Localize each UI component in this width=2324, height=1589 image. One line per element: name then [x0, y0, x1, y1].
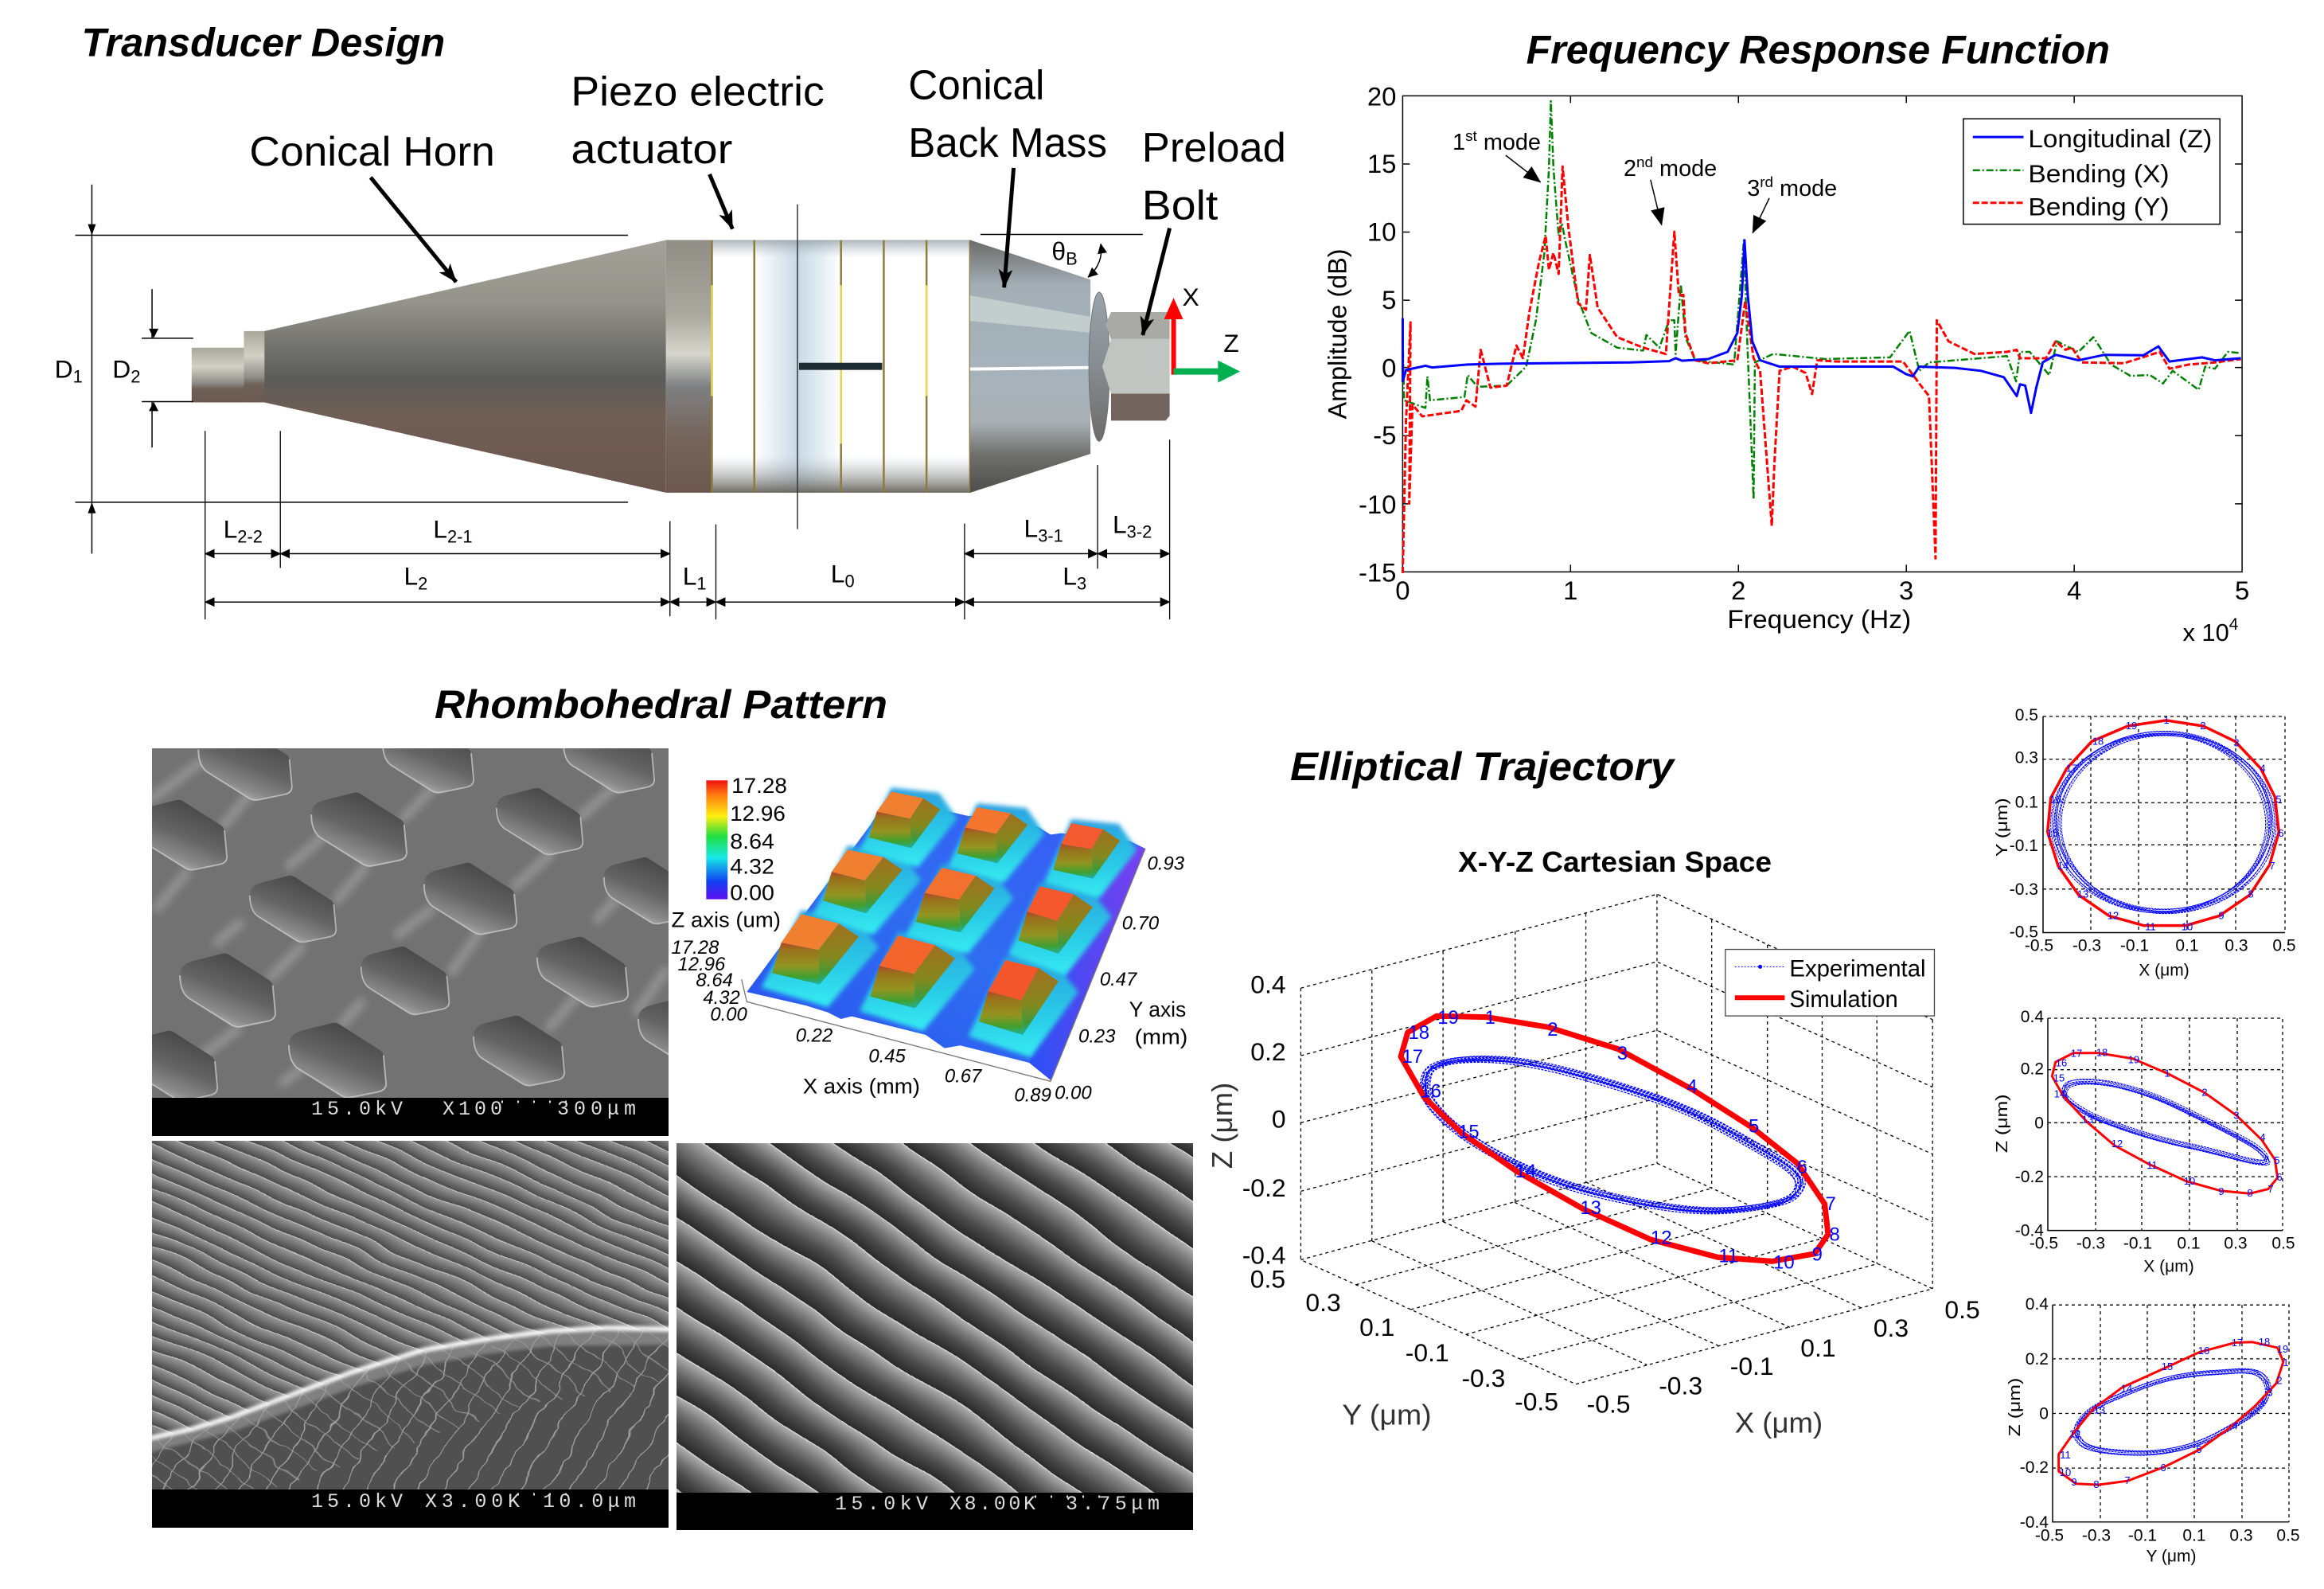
arrow: preload bolt: [1143, 228, 1170, 335]
chart: Y-Z projection: Y (μm): [2146, 1548, 2197, 1566]
y axis ticks: [1250, 1264, 1558, 1416]
point numbers: 3: [1617, 1043, 1628, 1064]
chart: Y-Z projection: 0.5: [2276, 1527, 2300, 1545]
x axis ticks: -0.1: [1730, 1352, 1774, 1380]
legend: [1963, 119, 2220, 224]
chart: X-Y projection: 1: [2163, 714, 2170, 726]
trajectory: experimental: [1420, 1056, 1805, 1214]
chart: X-Z projection: 7: [2267, 1183, 2274, 1195]
point numbers: 17: [1402, 1046, 1423, 1068]
chart: X-Z projection: 17: [2071, 1048, 2082, 1060]
coordinate axes X and Z: [1164, 283, 1240, 383]
chart: X-Z projection: 0.4: [2021, 1008, 2044, 1026]
label: preload bolt: Bolt: [1142, 182, 1218, 228]
chart: X-Y projection: 9: [2218, 910, 2225, 922]
chart: X-Y projection: 16: [2050, 793, 2061, 805]
curve: longitudinal Z: [1402, 240, 2241, 413]
panel: frequency response function: [1323, 28, 2249, 646]
chart: X-Z projection: X (μm): [2143, 1257, 2194, 1275]
chart: X-Z projection: 12: [2111, 1138, 2123, 1150]
point numbers: 6: [1797, 1157, 1807, 1178]
dimensions: lengths L0 to L3: 3-1: [1038, 526, 1063, 546]
SEM caption X100: [311, 1098, 636, 1121]
3D surface map: [742, 787, 1145, 1081]
chart: X-Y projection: 19: [2126, 720, 2137, 732]
chart title: X-Y-Z Cartesian Space: [1458, 845, 1772, 878]
y axis ticks: 0.3: [1305, 1288, 1341, 1317]
axis labels: 3D surface: Z axis (um): [672, 908, 781, 931]
y axis ticks: -0.3: [1461, 1364, 1505, 1392]
y axis tick labels: 20: [1367, 81, 1396, 111]
legend: Bending (Y): [2028, 193, 2170, 221]
chart: X-Y projection: 12: [2108, 910, 2119, 922]
chart: Y-Z projection: 19: [2277, 1343, 2288, 1355]
chart: X-Z projection: 0.2: [2021, 1060, 2044, 1079]
SEM caption X100: X100: [443, 1098, 502, 1121]
z axis ticks: 0.2: [1250, 1037, 1286, 1066]
chart: X-Y projection: -0.3: [2010, 880, 2038, 899]
x axis ticks: [1587, 1295, 1980, 1419]
label: conical back mass: [908, 61, 1107, 166]
chart: X-Y projection: -0.5: [2025, 936, 2053, 955]
axis labels: 3D surface: 0.23: [1078, 1026, 1116, 1048]
axis labels: 3D surface: 12.96: [678, 954, 726, 975]
z axis ticks: -0.4: [1242, 1241, 1286, 1270]
axis labels: 3D surface: 0.93: [1148, 853, 1185, 875]
y axis tick labels: 15: [1367, 149, 1396, 178]
x axis tick labels: 0: [1395, 576, 1410, 605]
y axis ticks: -0.5: [1515, 1388, 1558, 1416]
colour scale: [706, 774, 787, 905]
chart: X-Y projection: 15: [2047, 827, 2058, 839]
chart: X-Y projection: 3: [2233, 737, 2240, 749]
callout: 1st mode: [1452, 128, 1541, 182]
chart: X-Z projection: 6: [2276, 1171, 2283, 1183]
SEM caption X8.00K: [835, 1493, 1160, 1516]
chart: X-Y projection: 18: [2092, 736, 2104, 748]
axis titles: X (μm): [1735, 1407, 1823, 1439]
panel: elliptical trajectory: [1207, 706, 2300, 1566]
chart: X-Z projection: -0.1: [2123, 1235, 2152, 1253]
dimensions: diameters D1 and D2: 2: [131, 367, 140, 387]
legend: Longitudinal (Z): [2028, 124, 2212, 153]
dimensions: lengths L0 to L3: L: [831, 559, 844, 588]
angle theta B: θ: [1051, 236, 1066, 265]
y axis ticks: 0.5: [1250, 1264, 1285, 1293]
SEM caption X8.00K: 3.75μm: [1066, 1493, 1160, 1516]
x axis tick labels: 4: [2067, 576, 2081, 605]
coordinate axes X and Z: X: [1183, 283, 1199, 311]
dimensions: diameters D1 and D2: [55, 185, 1143, 554]
chart: X-Z projection: 16: [2056, 1057, 2067, 1069]
SEM caption X100: 15.0kV: [311, 1098, 403, 1121]
chart: X-Z projection: [1994, 1008, 2295, 1275]
x axis ticks: 0.3: [1874, 1314, 1909, 1342]
chart: Y-Z projection: 0: [2039, 1405, 2049, 1423]
axis labels: 3D surface: (mm): [1135, 1025, 1187, 1049]
chart: Y-Z projection: 18: [2259, 1336, 2270, 1348]
point numbers: 5: [1749, 1115, 1759, 1137]
3D grid box: [1300, 894, 1932, 1384]
chart: Y-Z projection: 0.1: [2182, 1527, 2206, 1545]
chart: Y-Z projection: 13: [2094, 1404, 2105, 1415]
chart: X-Z projection: 15: [2053, 1072, 2065, 1084]
point numbers: 15: [1458, 1121, 1480, 1142]
panel: rhombohedral pattern: [120, 682, 1230, 1530]
dimensions: lengths L0 to L3: 3-2: [1127, 522, 1152, 542]
chart: X-Z projection: 8: [2247, 1187, 2253, 1199]
chart: Y-Z projection: 9: [2071, 1476, 2077, 1488]
chart: X-Y projection: 11: [2145, 921, 2156, 933]
dimensions: lengths L0 to L3: 1: [696, 573, 707, 593]
chart: Y-Z projection: 10: [2060, 1466, 2071, 1478]
SEM caption X8.00K: X8.00K: [949, 1493, 1035, 1516]
piezo electric actuator rings: [712, 240, 970, 493]
x axis tick labels: 1: [1563, 576, 1577, 605]
label: preload bolt: [1142, 124, 1286, 228]
legend: Bending (X): [2028, 159, 2170, 188]
axis labels: 3D surface: 0.00: [710, 1004, 748, 1025]
chart: Y-Z projection: 14: [2121, 1383, 2132, 1395]
SEM image X100: [152, 748, 669, 1136]
y axis tick labels: 5: [1382, 285, 1396, 314]
back row blocks: [869, 791, 1120, 879]
axis labels: 3D surface: 17.28: [672, 937, 719, 958]
middle row blocks: [823, 849, 1093, 954]
chart: X-Z projection: 4: [2260, 1131, 2266, 1143]
callout: 2nd mode: nd: [1636, 154, 1653, 171]
axis titles: Z (μm): [1207, 1083, 1238, 1169]
centre line: [797, 205, 798, 529]
axis labels: 3D surface: 4.32: [703, 987, 740, 1009]
chart: X-Y projection: 0.3: [2225, 936, 2248, 955]
chart: X-Z projection: 10: [2184, 1175, 2195, 1187]
chart: X-Y projection: 0.5: [2015, 706, 2038, 724]
callout: 3rd mode: [1747, 174, 1837, 233]
y axis tick labels: -15: [1359, 557, 1396, 587]
heading: elliptical trajectory: Elliptical Trajectory: [1290, 744, 1675, 789]
chart: X-Y projection: 4: [2260, 763, 2266, 775]
legend: Simulation: [1789, 986, 1898, 1013]
chart: Y-Z projection: 17: [2232, 1337, 2243, 1349]
axis labels: 3D surface: 0.00: [1055, 1082, 1092, 1103]
legend: Experimental: [1789, 955, 1926, 982]
front row blocks: [772, 914, 1059, 1035]
preload bolt: [1102, 312, 1170, 420]
chart: X-Y projection: X (μm): [2139, 961, 2189, 979]
transducer body: [192, 240, 1170, 493]
axis labels: 3D surface: 0.22: [796, 1025, 833, 1047]
dimensions: lengths L0 to L3: L: [224, 515, 237, 544]
z axis ticks: 0.4: [1250, 970, 1286, 998]
axis labels: 3D surface: 0.47: [1100, 969, 1138, 990]
dimensions: lengths L0 to L3: L: [683, 561, 696, 590]
chart: X-Y projection: 0.5: [2272, 936, 2296, 955]
chart: Y-Z projection: 7: [2124, 1474, 2131, 1486]
chart: X-Z projection: 0: [2034, 1114, 2044, 1132]
exponent: 4: [2229, 615, 2238, 634]
chart: Y-Z projection: 16: [2198, 1345, 2209, 1357]
chart: Y-Z projection: 4: [2232, 1419, 2238, 1431]
heading: frequency response function: Frequency Response Function: [1527, 28, 2110, 72]
coordinate axes X and Z: Z: [1223, 329, 1239, 357]
point numbers: 19: [1437, 1007, 1459, 1029]
dimensions: lengths L0 to L3: L: [433, 515, 447, 544]
chart: X-Z projection: 3: [2233, 1109, 2240, 1121]
callout: 3rd mode: rd: [1760, 174, 1773, 191]
chart: Y-Z projection: 1: [2283, 1357, 2289, 1368]
callout: 1st mode: 1: [1452, 130, 1465, 155]
SEM caption X3.00K: X3.00K: [425, 1490, 520, 1513]
SEM image X3.00K: [152, 1141, 669, 1528]
chart: X-Y projection: -0.1: [2010, 837, 2038, 855]
y axis ticks: -0.1: [1406, 1338, 1449, 1367]
arrow: conical horn: [371, 178, 456, 282]
dimensions: lengths L0 to L3: L: [1063, 561, 1077, 590]
dimensions: lengths L0 to L3: [205, 431, 1170, 619]
callout: 3rd mode: 3: [1747, 176, 1760, 201]
point numbers: 4: [1686, 1076, 1698, 1098]
axis labels: 3D surface: X axis (mm): [803, 1074, 920, 1098]
chart: X-Z projection: -0.3: [2076, 1235, 2105, 1253]
point numbers: 10: [1773, 1252, 1795, 1274]
angle theta B: [1051, 236, 1102, 277]
chart: Y-Z projection: 0.3: [2229, 1527, 2253, 1545]
x axis ticks: -0.5: [1587, 1390, 1631, 1419]
chart: amplitude versus frequency: [1323, 81, 2249, 646]
dimensions: diameters D1 and D2: 1: [73, 367, 83, 387]
y axis tick labels: 10: [1367, 217, 1396, 246]
point numbers: 18: [1408, 1022, 1429, 1044]
dimensions: lengths L0 to L3: L: [404, 561, 418, 590]
chart: X-Y projection: [1994, 706, 2296, 979]
plot frame and ticks: [1402, 96, 2242, 572]
dimensions: lengths L0 to L3: 2-2: [237, 527, 263, 547]
x axis tick labels: 2: [1731, 576, 1745, 605]
chart: Y-Z projection: 2: [2276, 1375, 2283, 1387]
x axis ticks: -0.3: [1659, 1372, 1702, 1400]
axis labels: 3D surface: [672, 853, 1187, 1106]
chart: Y-Z projection: [2006, 1295, 2300, 1566]
axis titles: Y (μm): [1342, 1400, 1432, 1431]
chart: X-Z projection: 11: [2147, 1159, 2158, 1171]
point numbers: 12: [1651, 1228, 1671, 1249]
point numbers: 1: [1485, 1007, 1495, 1029]
arrow: back mass: [1004, 168, 1014, 287]
callout: 1st mode: mode: [1477, 130, 1541, 155]
plateaus: [762, 787, 1137, 1057]
arrow: piezo actuator: [710, 174, 732, 229]
SEM caption X3.00K: [311, 1490, 636, 1513]
chart: Y-Z projection: 11: [2060, 1449, 2071, 1461]
chart: Y-Z projection: Z (μm): [2006, 1378, 2024, 1436]
x axis ticks: 0.1: [1800, 1333, 1836, 1362]
chart: Y-Z projection: -0.4: [2020, 1513, 2049, 1532]
chart: X-Z projection: 19: [2128, 1054, 2139, 1066]
curve: bending Y: [1402, 166, 2241, 573]
point numbers: 16: [1420, 1081, 1441, 1103]
chart: X-Z projection: 5: [2274, 1154, 2280, 1166]
y axis tick labels: 0: [1382, 353, 1396, 383]
chart: X-Z projection: Z (μm): [1994, 1095, 2011, 1153]
surface base: [747, 791, 1145, 1080]
point numbers: 11: [1718, 1246, 1738, 1267]
chart: X-Y projection: 2: [2200, 720, 2206, 732]
dimensions: lengths L0 to L3: 0: [844, 571, 855, 591]
chart: X-Z projection: -0.5: [2030, 1235, 2058, 1253]
point numbers: 8: [1829, 1224, 1840, 1246]
label: conical horn: Conical Horn: [249, 128, 495, 174]
chart: X-Y projection: 8: [2248, 888, 2254, 900]
chart: X-Y projection: -0.5: [2010, 923, 2038, 941]
angle theta B: B: [1066, 248, 1078, 268]
chart: Y-Z projection: -0.1: [2128, 1527, 2157, 1545]
y axis ticks: 0.1: [1359, 1313, 1394, 1341]
exponent: x 10: [2182, 619, 2229, 646]
chart: X-Y projection: Y (μm): [1994, 798, 2011, 857]
x axis tick labels: [1395, 576, 2249, 605]
chart: X-Y projection: 14: [2057, 860, 2069, 872]
trajectory: simulation: [1401, 1016, 1828, 1261]
chart: X-Y projection: 0.1: [2015, 793, 2038, 811]
label: piezo electric actuator: actuator: [571, 126, 732, 172]
z axis ticks: 0: [1272, 1104, 1286, 1133]
point numbers: 2: [1547, 1019, 1558, 1040]
z axis ticks: [1242, 970, 1286, 1270]
chart: X-Y projection: 0.3: [2015, 749, 2038, 767]
chart: X-Y projection: 5: [2275, 793, 2282, 805]
SEM image X8.00K: [677, 1143, 1193, 1530]
conical back mass: [970, 240, 1090, 493]
chart: Y-Z projection: 3: [2267, 1387, 2273, 1399]
conical horn: [192, 240, 712, 493]
chart: Y-Z projection: -0.2: [2020, 1458, 2049, 1477]
colour scale: 12.96: [730, 802, 786, 826]
chart: X-Y projection: 6: [2278, 827, 2284, 839]
point numbers: 9: [1812, 1244, 1823, 1266]
chart: X-Z projection: -0.2: [2015, 1168, 2044, 1186]
SEM caption X8.00K: 15.0kV: [835, 1493, 928, 1516]
dimensions: lengths L0 to L3: 2-1: [447, 527, 473, 547]
chart: X-Y projection: -0.1: [2120, 936, 2149, 955]
label: preload bolt: Preload: [1142, 124, 1286, 170]
y axis title: Amplitude (dB): [1323, 248, 1352, 419]
z axis ticks: -0.2: [1242, 1173, 1286, 1202]
SEM caption X3.00K: 15.0kV: [311, 1490, 403, 1513]
axis labels: 3D surface: 0.89: [1014, 1084, 1051, 1106]
label: conical back mass: Back Mass: [908, 119, 1107, 166]
label: piezo electric actuator: Piezo electric: [571, 68, 825, 114]
chart: X-Y projection: 17: [2066, 763, 2077, 775]
chart: Y-Z projection: 12: [2069, 1427, 2080, 1439]
panel: transducer design: [55, 21, 1286, 619]
callout: 2nd mode: 2: [1624, 156, 1636, 182]
axis titles: [1207, 1083, 1823, 1439]
legend: [1725, 950, 1934, 1016]
callout: 3rd mode: mode: [1773, 176, 1837, 201]
chart: X-Y projection: 0.1: [2175, 936, 2199, 955]
x axis tick labels: 5: [2235, 576, 2249, 605]
x axis ticks: 0.5: [1944, 1295, 1980, 1324]
colour scale: 17.28: [731, 774, 787, 798]
chart: X-Z projection: 0.5: [2271, 1235, 2295, 1253]
y axis tick labels: -10: [1359, 490, 1396, 519]
chart: X-Z projection: 0.1: [2177, 1235, 2201, 1253]
chart: Y-Z projection: 6: [2160, 1462, 2166, 1474]
dimensions: diameters D1 and D2: D: [112, 355, 131, 384]
curve: bending X: [1402, 101, 2241, 499]
point numbers: 7: [1825, 1193, 1836, 1215]
chart: X-Y projection: 13: [2077, 888, 2088, 900]
chart: X-Z projection: 1: [2164, 1068, 2170, 1080]
chart: X-Z projection: 14: [2054, 1088, 2065, 1099]
axis labels: 3D surface: Y axis: [1129, 998, 1186, 1021]
chart: Y-Z projection: 0.2: [2026, 1350, 2049, 1368]
axis labels: 3D surface: 8.64: [696, 970, 733, 991]
dimensions: lengths L0 to L3: L: [1024, 514, 1038, 543]
heading: transducer design: Transducer Design: [81, 21, 445, 65]
chart: Y-Z projection: 8: [2093, 1478, 2100, 1490]
x axis tick labels: 3: [1899, 576, 1913, 605]
callout: 2nd mode: [1624, 154, 1717, 225]
colour scale: 8.64: [730, 830, 774, 853]
axis labels: 3D surface: 0.45: [868, 1046, 907, 1068]
chart: X-Z projection: 9: [2218, 1185, 2225, 1197]
axis labels: 3D surface: 0.70: [1122, 912, 1160, 934]
dimensions: lengths L0 to L3: 2: [418, 573, 427, 593]
colour scale: 4.32: [730, 855, 774, 879]
chart: X-Z projection: 2: [2201, 1087, 2208, 1098]
chart: Y-Z projection: 15: [2162, 1361, 2173, 1372]
x axis title: Frequency (Hz): [1727, 604, 1911, 634]
colour scale: 0.00: [730, 881, 774, 905]
callout: 1st mode: st: [1465, 128, 1478, 145]
y axis tick labels: [1359, 81, 1396, 587]
chart: Y-Z projection: 5: [2196, 1443, 2202, 1455]
label: piezo electric actuator: [571, 68, 825, 172]
axis labels: 3D surface: 0.67: [945, 1065, 983, 1087]
chart: X-Z projection: -0.4: [2015, 1222, 2044, 1240]
chart: Y-Z projection: -0.5: [2035, 1527, 2064, 1545]
SEM caption X100: 300μm: [557, 1098, 636, 1121]
label: conical back mass: Conical: [908, 61, 1044, 107]
heading: rhombohedral pattern: Rhombohedral Pattern: [435, 682, 887, 727]
chart: X-Z projection: 18: [2096, 1047, 2108, 1059]
chart: X-Y projection: -0.3: [2072, 936, 2101, 955]
point numbers: 14: [1515, 1161, 1536, 1182]
washer: [1089, 292, 1109, 441]
y axis tick labels: -5: [1373, 420, 1396, 450]
chart: Y-Z projection: 0.4: [2026, 1295, 2049, 1314]
point numbers: [1402, 1007, 1840, 1274]
callout: 2nd mode: mode: [1653, 156, 1717, 182]
dimensions: diameters D1 and D2: D: [55, 355, 73, 384]
chart: X-Z projection: 0.3: [2224, 1235, 2248, 1253]
chart: X-Y projection: 10: [2182, 921, 2193, 933]
SEM caption X3.00K: 10.0μm: [543, 1490, 636, 1513]
chart: Y-Z projection: -0.3: [2082, 1527, 2111, 1545]
chart: X-Y projection: 7: [2269, 860, 2275, 872]
point numbers: 13: [1580, 1197, 1601, 1219]
3D trajectory chart: [1207, 894, 1980, 1439]
dimensions: lengths L0 to L3: 3: [1077, 573, 1086, 593]
curves: [1402, 101, 2241, 573]
dimensions: lengths L0 to L3: L: [1113, 510, 1127, 539]
chart: X-Z projection: 13: [2082, 1113, 2093, 1125]
